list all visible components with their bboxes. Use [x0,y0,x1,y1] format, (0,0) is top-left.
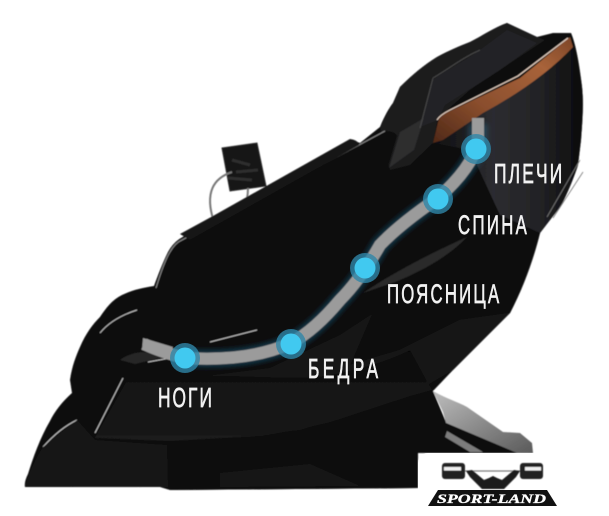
dot: legs [170,343,200,373]
base floor panel [168,392,445,490]
lower leg panel [95,350,432,441]
backrest panel [137,131,397,340]
outer back shell [433,47,583,233]
lower seat panel [95,233,540,438]
label: back: СПИНА [458,210,527,240]
headrest [380,23,545,170]
dot: waist [350,253,380,283]
label: legs: НОГИ [158,382,212,413]
tablet remote control [210,143,266,222]
icon: weightlifter with barbell [442,463,543,489]
remote cable [210,172,248,222]
logo banner [428,490,557,506]
dot: hips [276,329,306,359]
foot panel [25,420,168,487]
dark waist stripe [350,233,540,365]
label: shoulders: ПЛЕЧИ [494,158,562,189]
logo text: SPORT-LAND [437,491,547,506]
dot: back [423,184,453,214]
chair base chrome piece [433,391,533,453]
label: lower back: ПОЯСНИЦА [387,279,499,309]
copper trim highlight [437,38,568,120]
massage path band [144,118,478,359]
massage path glow [185,124,478,359]
chair top rail [180,139,359,240]
logo panel [418,453,609,516]
copper trim [433,37,573,143]
label: hips: БЕДРА [308,353,378,384]
gloss highlights [43,310,257,476]
dot: shoulders [461,134,491,164]
